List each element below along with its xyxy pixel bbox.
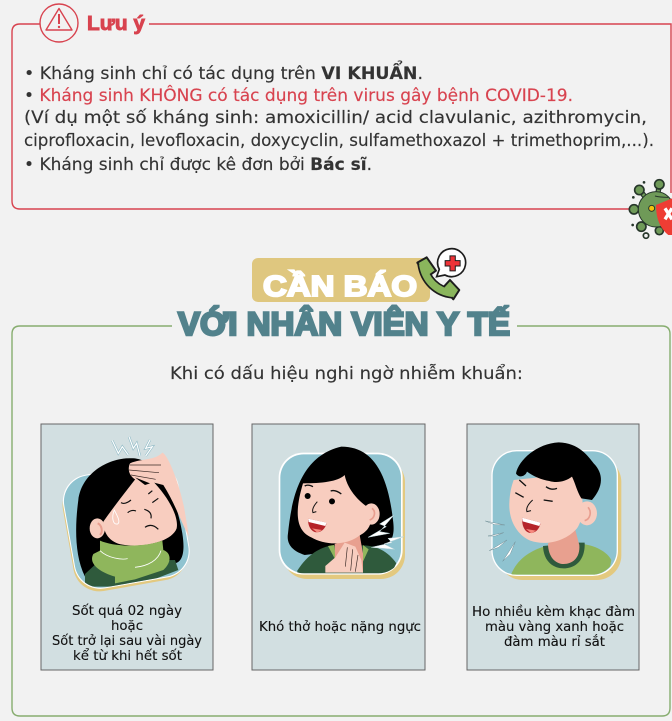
caption: sốt: Sốt quá 02 ngày (72, 602, 182, 619)
text block: notes (24, 61, 654, 174)
icon: warning triangle (40, 4, 78, 42)
caption: sốt: kể từ khi hết sốt (73, 647, 182, 664)
text block: notes: • Kháng sinh chỉ có tác dụng trên VI KHUẨN . (24, 61, 423, 83)
subtitle: Khi có dấu hiệu nghi ngờ nhiễm khuẩn: (170, 364, 523, 383)
illustration: woman with fever (58, 437, 194, 596)
caption: ho: Ho nhiều kèm khạc đàm (472, 603, 635, 620)
heading: lưu ý: Lưu ý (87, 13, 146, 35)
icon: phone with medical bubble (417, 249, 466, 299)
caption: ho: màu vàng xanh hoặc (485, 619, 624, 635)
text block: notes: ciprofloxacin, levofloxacin, doxycyclin, sulfamethoxazol + trimethoprim,...). (24, 131, 654, 150)
panel: lưu ý warning (12, 4, 672, 238)
illustration: man coughing (485, 442, 621, 580)
heading: với nhân viên y tế: VỚI NHÂN VIÊN Y TẾ (178, 306, 510, 342)
illustration: woman short of breath (279, 447, 405, 579)
caption: sốt: hoặc (111, 618, 143, 634)
card: ho (467, 424, 639, 670)
caption: khó thở: Khó thở hoặc nặng ngực (259, 619, 421, 635)
caption: sốt: Sốt trở lại sau vài ngày (52, 632, 202, 649)
heading: cần báo: CẦN BÁO (263, 269, 417, 303)
red panel outline (12, 24, 671, 209)
card: sốt (41, 424, 213, 670)
text block: notes: (Ví dụ một số kháng sinh: amoxicillin/ acid clavulanic, azithromycin, (24, 108, 647, 127)
text block: notes: • Kháng sinh chỉ được kê đơn bởi Bác sĩ. (24, 155, 372, 174)
heading: cần báo (252, 258, 430, 303)
card: khó thở (252, 424, 425, 670)
caption: sốt (52, 602, 202, 664)
caption: ho (472, 603, 635, 650)
green panel outline (12, 326, 670, 716)
panel: báo nhân viên y tế (12, 249, 670, 716)
caption: ho: đàm màu rỉ sắt (504, 633, 605, 650)
text block: notes: • Kháng sinh KHÔNG có tác dụng trên virus gây bệnh COVID-19. (24, 86, 573, 105)
icon: virus with shield (629, 180, 672, 238)
